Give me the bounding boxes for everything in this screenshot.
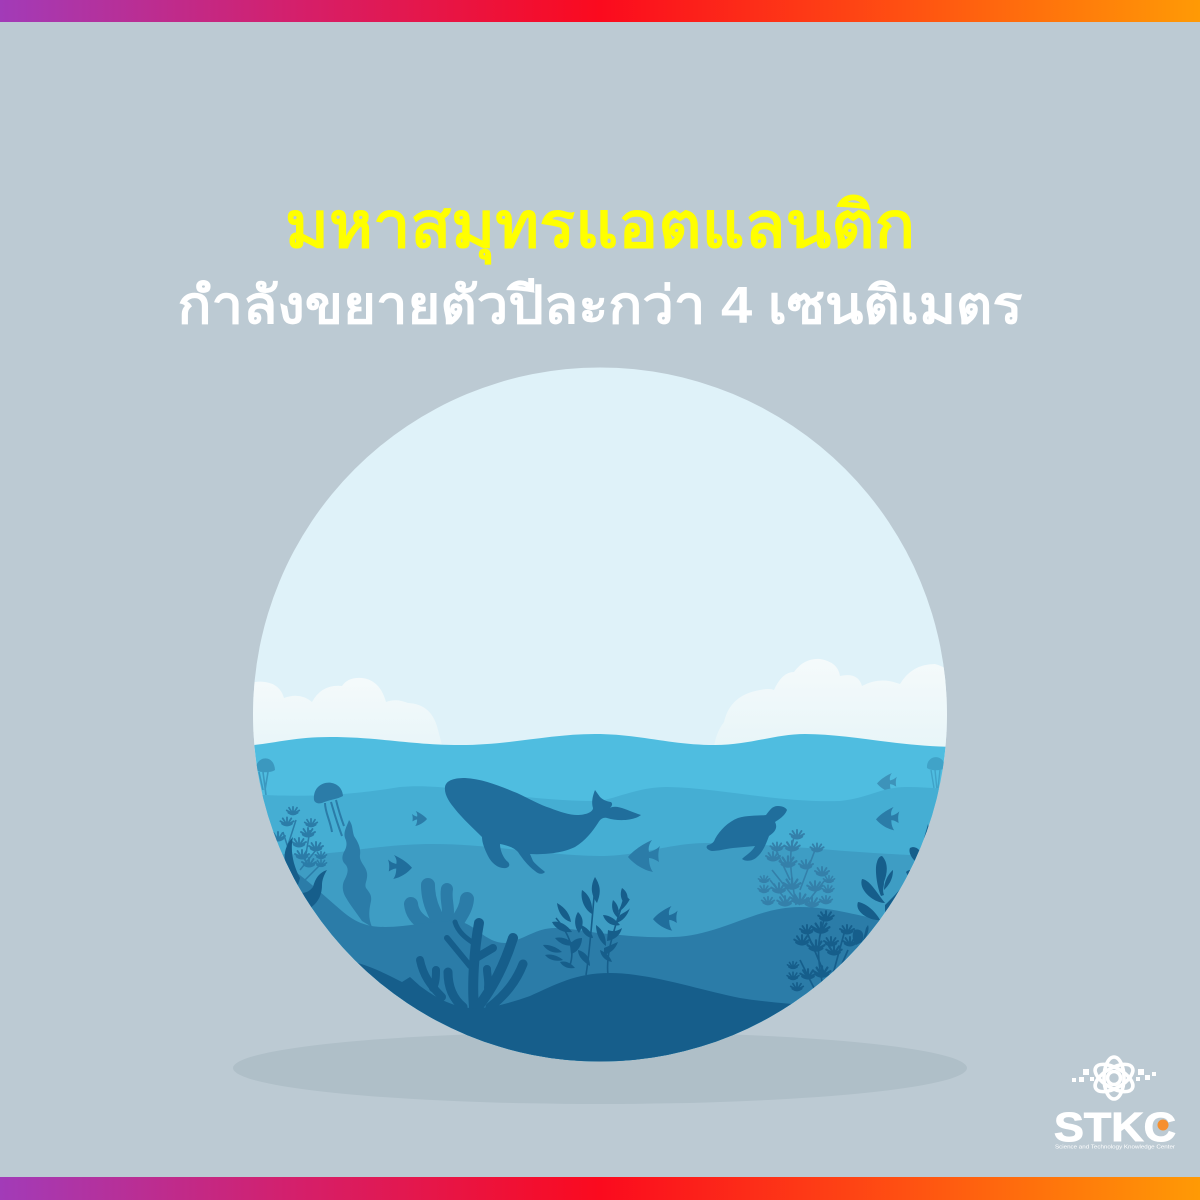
logo atom emblem [1091, 1057, 1137, 1099]
logo pixel squares [1072, 1069, 1156, 1082]
turtle [707, 806, 787, 861]
kelp [342, 820, 372, 927]
dark seaweed left [285, 837, 327, 908]
small fish [412, 811, 427, 826]
bottom gradient bar [0, 1177, 1200, 1200]
STKC logo [1054, 1057, 1176, 1150]
faint jellyfish left [256, 758, 275, 795]
jellyfish [314, 783, 344, 836]
left cloud [253, 678, 442, 745]
logo wordmark: STKC [1054, 1104, 1176, 1150]
right cloud [714, 659, 947, 746]
sea surface layer [240, 734, 960, 1080]
faint jellyfish right [927, 757, 945, 790]
whale [445, 778, 641, 874]
seabed layer [358, 963, 792, 1062]
fish lower centre [653, 906, 678, 931]
water layer 4 [288, 868, 880, 1062]
top gradient bar [0, 0, 1200, 22]
ocean globe illustration [240, 365, 960, 1080]
title block [178, 189, 1023, 335]
dark coral [420, 922, 523, 1007]
dark seaweed right [853, 824, 932, 945]
water layer 3 [282, 843, 917, 1062]
fish right mid [876, 807, 899, 830]
heading: Atlantic Ocean: มหาสมุทรแอตแลนติก [285, 189, 915, 265]
water layer 2 [262, 786, 939, 1062]
ground shadow [233, 1032, 967, 1104]
fern [543, 877, 630, 975]
fish centre [628, 840, 660, 872]
light coral [411, 885, 467, 928]
light aquatic plant right [758, 830, 835, 906]
logo orange dot [1158, 1120, 1168, 1130]
sky [250, 365, 950, 765]
dark aquatic plant [787, 911, 857, 995]
fish top right [877, 773, 897, 790]
fish left [388, 855, 412, 879]
subheading: expands more than 4 cm per year: กำลังขยายตัวปีละกว่า 4 เซนติเมตร [178, 277, 1023, 335]
light aquatic plant left [271, 807, 327, 880]
logo tagline: Science and Technology Knowledge Center [1055, 1144, 1175, 1150]
